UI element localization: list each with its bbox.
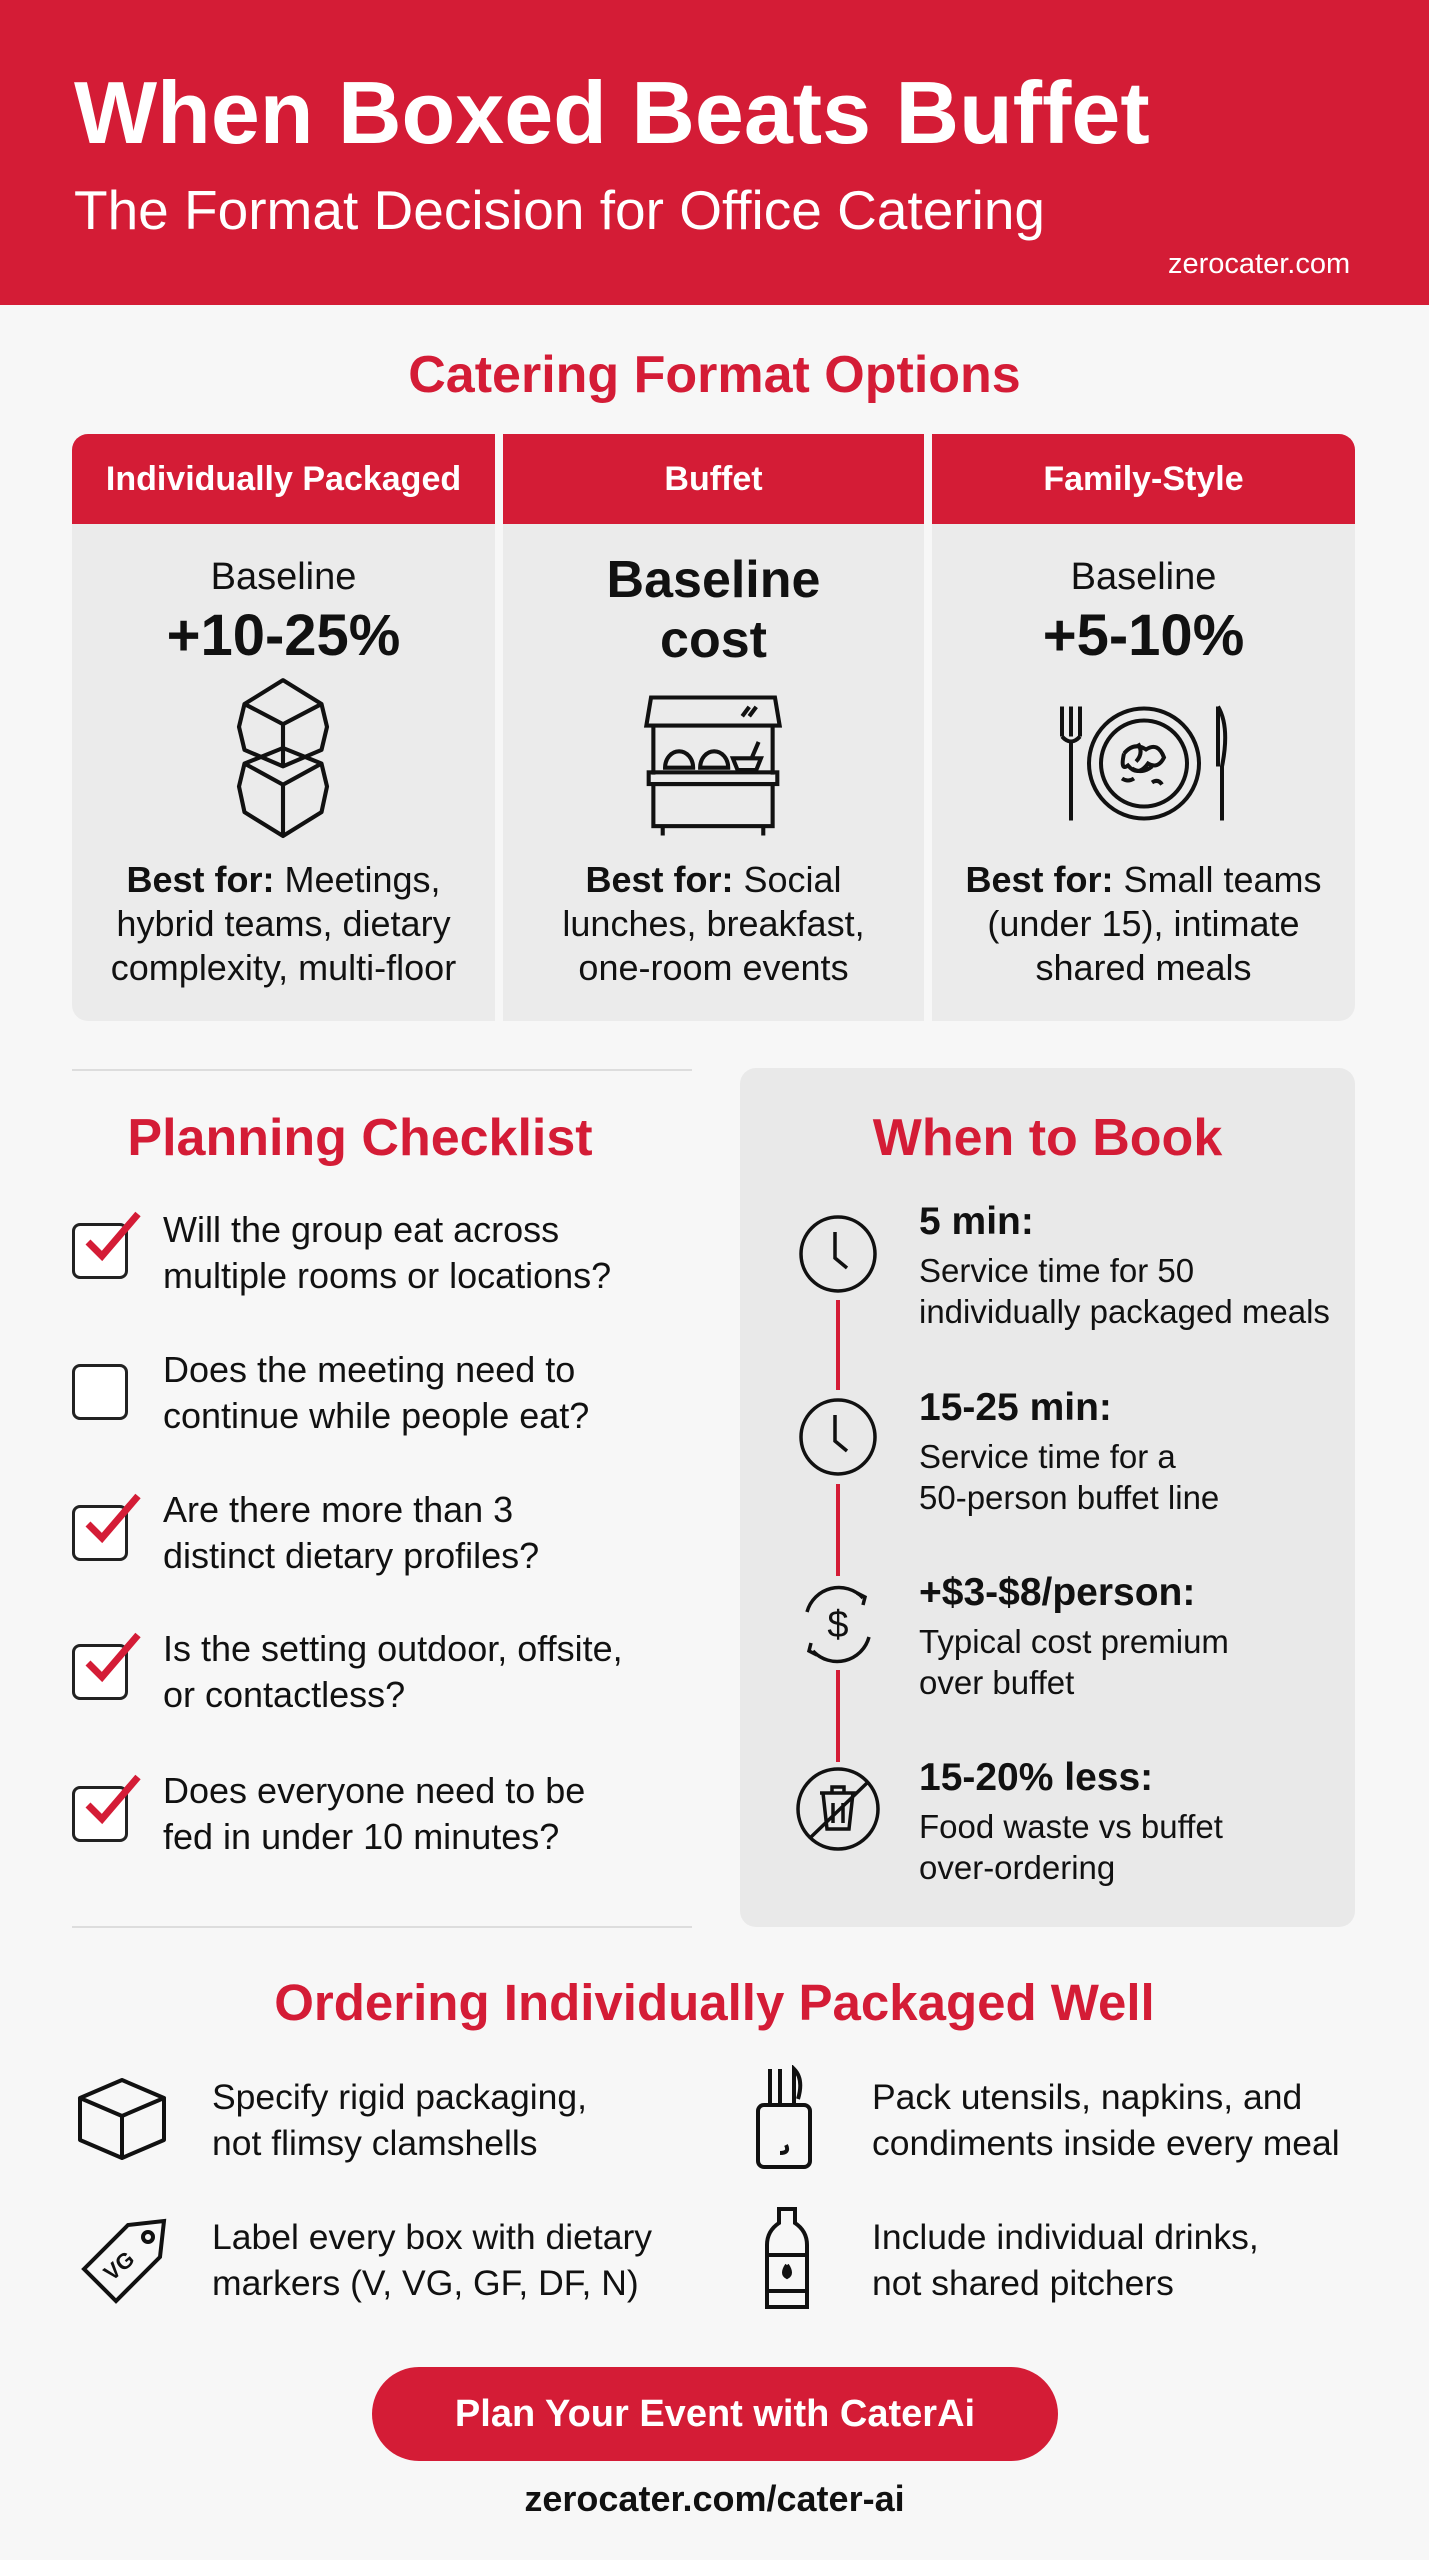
title: When Boxed Beats Buffet [74,63,1150,162]
card: family-style: Family-Style [1043,460,1244,498]
tip: individual drinks: not shared pitchers [872,2263,1174,2303]
stat: cost premium [919,1571,1229,1701]
panel: planning checklist: Does the meeting need to [163,1349,575,1390]
icon: tag [81,2218,166,2304]
panel: planning checklist [72,1109,623,1857]
tip: utensils: condiments inside every meal [872,2123,1340,2163]
tip: individual drinks [765,2207,1259,2309]
source url: zerocater.com [1168,248,1350,280]
stat: food waste: 15-20% less: [919,1756,1153,1799]
tip: dietary labels [81,2217,652,2304]
card: individually packaged: Best for: Meetings, [126,859,441,900]
checklist items [72,1223,128,1279]
heading: catering format options: Catering Format Options [408,346,1021,404]
icon: box [78,2078,166,2160]
stat: 5 min [919,1200,1330,1330]
footer url: zerocater.com/cater-ai [524,2478,905,2519]
stat: 15-25 min: 15-25 min: [919,1386,1112,1429]
card: family-style [932,434,1355,1021]
icon: stacked boxes [236,678,330,838]
card: buffet: cost [660,611,767,669]
icon: utensil cup [756,2065,812,2169]
card: family-style: +5-10% [1043,603,1244,668]
card: buffet: lunches, breakfast, [562,903,865,944]
stat: cost premium: +$3-$8/person: [919,1571,1195,1614]
panel: planning checklist: Does everyone need to be [163,1770,585,1811]
stat: food waste [919,1756,1223,1886]
icon: buffet station [644,696,782,836]
heading: ordering individually packaged well: Ordering Individually Packaged Well [274,1974,1155,2031]
tip: utensils [756,2065,1340,2169]
card: buffet: Best for: Social [585,859,842,900]
card: buffet: Buffet [664,460,763,498]
stat: 5 min: Service time for 50 [919,1252,1194,1289]
tip: rigid packaging [78,2077,587,2163]
icon: bottle [765,2207,809,2309]
timeline icons and connectors: $ [827,1604,849,1646]
card: individually packaged [72,434,495,1021]
timeline icons and connectors [796,1215,880,1851]
stat: food waste: Food waste vs buffet [919,1808,1223,1845]
icon: tag: VG [99,2246,139,2286]
card: buffet: Baseline [607,551,820,609]
stat: 15-25 min [919,1386,1219,1516]
divider [72,1926,692,1928]
tip: rigid packaging: not flimsy clamshells [212,2123,538,2163]
subtitle: The Format Decision for Office Catering [74,179,1045,241]
card: individually packaged: hybrid teams, dietary [116,903,451,944]
card: family-style: Best for: Small teams [965,859,1322,900]
card: family-style: shared meals [1035,947,1252,988]
icon: plate and cutlery [1060,706,1228,820]
card: family-style: (under 15), intimate [987,903,1300,944]
stat: food waste: over-ordering [919,1849,1115,1886]
stat: 5 min: 5 min: [919,1200,1034,1243]
stat: 5 min: individually packaged meals [919,1293,1330,1330]
tip: dietary labels: Label every box with dietary [212,2217,652,2257]
panel: planning checklist: distinct dietary profiles? [163,1535,539,1576]
stat: cost premium: Typical cost premium [919,1623,1229,1660]
tip: individual drinks: Include individual drinks, [872,2217,1259,2257]
panel: planning checklist: fed in under 10 minutes? [163,1816,559,1857]
header banner [0,0,1429,305]
card: buffet: one-room events [578,947,849,988]
card: individually packaged: Baseline [211,556,356,598]
stat: cost premium: over buffet [919,1664,1074,1701]
panel: planning checklist: multiple rooms or locations? [163,1255,611,1296]
stat: 15-25 min: 50-person buffet line [919,1479,1219,1516]
card: family-style: Baseline [1071,556,1216,598]
heading: when to book: When to Book [873,1109,1222,1167]
tip: dietary labels: markers (V, VG, GF, DF, N) [212,2263,639,2303]
card: individually packaged: +10-25% [167,603,400,668]
panel: planning checklist: Is the setting outdoor, offsite, [163,1628,623,1669]
panel: planning checklist: Will the group eat across [163,1209,559,1250]
heading: planning checklist: Planning Checklist [127,1109,593,1167]
card: buffet [503,434,924,1021]
panel: planning checklist: continue while people eat? [163,1395,589,1436]
stat: 15-25 min: Service time for a [919,1438,1176,1475]
card: individually packaged: complexity, multi-floor [111,947,456,988]
panel: planning checklist: Are there more than 3 [163,1489,513,1530]
tip: rigid packaging: Specify rigid packaging, [212,2077,587,2117]
divider [72,1069,692,1071]
tip: utensils: Pack utensils, napkins, and [872,2077,1302,2117]
button: plan your event [372,2367,1058,2461]
panel: when to book [740,1068,1355,1927]
panel: planning checklist: or contactless? [163,1674,405,1715]
button: plan your event: Plan Your Event with CaterAi [455,2393,975,2435]
card: individually packaged: Individually Packaged [106,460,461,498]
